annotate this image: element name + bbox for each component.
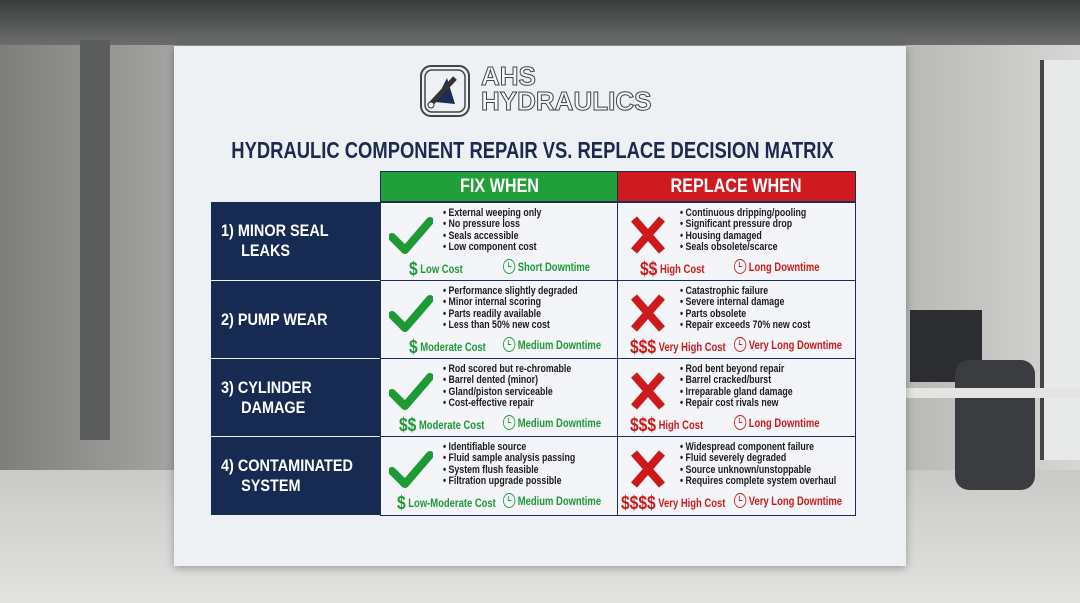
row 3 fix cell: Rod scored but re-chromable bbox=[449, 363, 571, 375]
row 2 fix cell: Less than 50% new cost bbox=[449, 319, 550, 331]
row 1 fix cell bbox=[380, 202, 618, 281]
row 1 fix cell: $ Low Cost bbox=[409, 259, 463, 280]
row 4 fix cell: Filtration upgrade possible bbox=[449, 475, 561, 487]
row 3 replace cell: $$$ High Cost bbox=[630, 415, 703, 436]
row 4 replace cell: Source unknown/unstoppable bbox=[686, 464, 811, 476]
row 3 label bbox=[211, 359, 380, 436]
row 3 fix cell: Medium Downtime bbox=[518, 418, 601, 430]
row 2 label bbox=[211, 281, 380, 358]
row 2 fix cell: Medium Downtime bbox=[518, 340, 601, 352]
chair bbox=[955, 360, 1035, 490]
row 4 fix cell: System flush feasible bbox=[449, 464, 539, 476]
row 1 label: LEAKS bbox=[241, 241, 290, 260]
row 1 fix cell: Short Downtime bbox=[518, 262, 590, 274]
row 3 fix cell bbox=[380, 358, 618, 437]
row 3 replace cell: Rod bent beyond repair bbox=[686, 363, 784, 375]
logo text bbox=[481, 61, 651, 116]
row 2 replace cell: Repair exceeds 70% new cost bbox=[686, 319, 810, 331]
row 4 label: SYSTEM bbox=[241, 476, 301, 495]
row 3 replace cell: Long Downtime bbox=[749, 418, 819, 430]
row 3 label: 3) CYLINDER bbox=[221, 378, 312, 396]
title: HYDRAULIC COMPONENT REPAIR VS. REPLACE DECISION MATRIX bbox=[232, 137, 834, 163]
background: right wall bbox=[906, 45, 1080, 475]
header: replace when bbox=[617, 171, 856, 202]
row 1 replace cell: $$ High Cost bbox=[640, 259, 704, 280]
row 4 fix cell: Medium Downtime bbox=[518, 496, 601, 508]
row 3 fix cell: $$ Moderate Cost bbox=[399, 415, 484, 436]
row 4 label bbox=[211, 437, 380, 515]
row 1 fix cell: Low component cost bbox=[449, 241, 537, 253]
row 4 replace cell: Requires complete system overhaul bbox=[686, 475, 836, 487]
row 2 fix cell bbox=[380, 280, 618, 359]
background: floor bbox=[0, 470, 1080, 603]
row 1 replace cell: Continuous dripping/pooling bbox=[686, 207, 806, 219]
row 2 replace cell: Very Long Downtime bbox=[749, 340, 842, 352]
row 1 fix cell: No pressure loss bbox=[449, 218, 520, 230]
header: fix when bbox=[380, 171, 618, 202]
desk bbox=[906, 388, 1080, 398]
row 3 fix cell: Gland/piston serviceable bbox=[449, 386, 553, 398]
row 3 replace cell bbox=[617, 358, 856, 437]
row 4 fix cell: Fluid sample analysis passing bbox=[449, 452, 575, 464]
row 4 fix cell: Identifiable source bbox=[449, 441, 526, 453]
row 1 label: 1) MINOR SEAL bbox=[221, 221, 329, 240]
row 2 replace cell: $$$ Very High Cost bbox=[630, 337, 726, 358]
background: office ceiling bbox=[0, 0, 1080, 45]
row 3 replace cell: Repair cost rivals new bbox=[686, 397, 778, 409]
row 1 fix cell: Seals accessible bbox=[449, 230, 519, 242]
monitor bbox=[910, 310, 982, 382]
row 4 fix cell: $ Low-Moderate Cost bbox=[397, 493, 496, 514]
logo bbox=[420, 61, 651, 117]
header: fix when: FIX WHEN bbox=[460, 176, 538, 197]
row 4 label: 4) CONTAMINATED bbox=[221, 456, 353, 475]
row 3 label: DAMAGE bbox=[241, 398, 305, 416]
row 2 fix cell: Minor internal scoring bbox=[449, 296, 541, 308]
row 4 replace cell bbox=[617, 436, 856, 516]
row 2 fix cell: Performance slightly degraded bbox=[449, 285, 578, 297]
row 4 fix cell bbox=[380, 436, 618, 516]
logo text: AHS bbox=[481, 61, 536, 91]
row 1 replace cell: Long Downtime bbox=[749, 262, 819, 274]
row 2 label: 2) PUMP WEAR bbox=[221, 310, 328, 328]
row 2 replace cell: Catastrophic failure bbox=[686, 285, 768, 297]
row 1 replace cell: Seals obsolete/scarce bbox=[686, 241, 778, 253]
row 1 label bbox=[211, 202, 380, 280]
row 4 replace cell: Widespread component failure bbox=[686, 441, 814, 453]
row 1 replace cell: Significant pressure drop bbox=[686, 218, 792, 230]
row 3 fix cell: Barrel dented (minor) bbox=[449, 374, 538, 386]
row 2 fix cell: $ Moderate Cost bbox=[409, 337, 486, 358]
row 4 replace cell: Fluid severely degraded bbox=[686, 452, 786, 464]
row 2 replace cell: Parts obsolete bbox=[686, 308, 746, 320]
row 3 fix cell: Cost-effective repair bbox=[449, 397, 534, 409]
background: column bbox=[80, 40, 110, 440]
logo text: HYDRAULICS bbox=[481, 86, 651, 116]
row 2 replace cell bbox=[617, 280, 856, 359]
header: replace when: REPLACE WHEN bbox=[671, 176, 802, 197]
row 1 fix cell: External weeping only bbox=[449, 207, 541, 219]
background: window bbox=[1040, 60, 1080, 460]
row 2 replace cell: Severe internal damage bbox=[686, 296, 784, 308]
row 3 replace cell: Barrel cracked/burst bbox=[686, 374, 771, 386]
row 3 replace cell: Irreparable gland damage bbox=[686, 386, 793, 398]
row 4 replace cell: Very Long Downtime bbox=[749, 496, 842, 508]
row 1 replace cell: Housing damaged bbox=[686, 230, 762, 242]
row 2 fix cell: Parts readily available bbox=[449, 308, 541, 320]
poster board bbox=[174, 46, 906, 566]
row 4 replace cell: $$$$ Very High Cost bbox=[621, 493, 725, 514]
background: left wall bbox=[0, 45, 174, 475]
icon: logo emblem bbox=[420, 65, 470, 117]
row 1 replace cell bbox=[617, 202, 856, 281]
